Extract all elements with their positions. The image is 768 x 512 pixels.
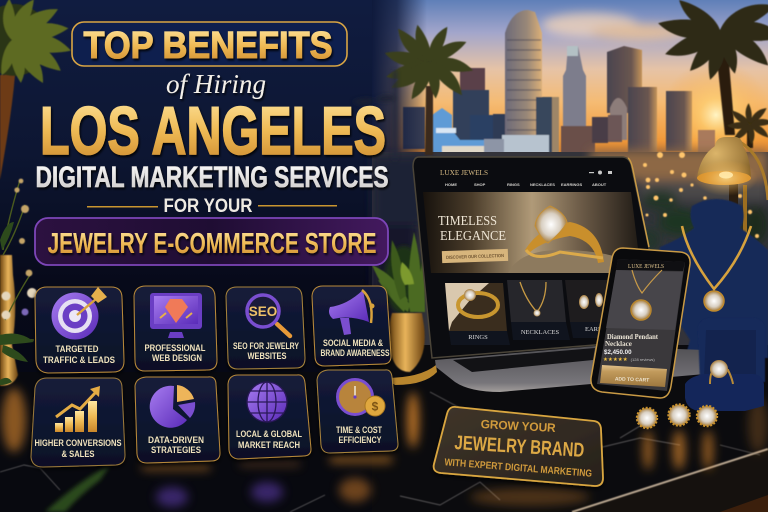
marble veins [0,392,760,512]
laptop base [435,346,705,392]
subheading: of hiring: of Hiring [166,69,266,99]
earring 2 [668,404,690,426]
card: time and cost efficiency [317,370,398,453]
purple pill: jewelry e-commerce store [35,218,388,265]
add to cart button [600,365,667,387]
heading: TOP BENEFITS [84,25,332,67]
hero heading: TIMELESS [438,214,497,229]
card reflections on table [142,456,392,507]
tile: earrings [565,280,620,338]
card: time and cost efficiency: EFFICIENCY [338,435,382,445]
keyboard [453,348,595,372]
foliage mass [384,246,424,314]
card: data-driven strategies: STRATEGIES [151,445,201,455]
price: $2,450.00 [604,349,632,356]
ring box [685,318,765,411]
vase base [385,365,437,385]
brand name: LUXE JEWELS [440,168,488,177]
hero heading: ELEGANCE [440,229,506,244]
hero heading [438,214,506,244]
decoration: left vase with flowers [0,179,37,386]
icon: globe [247,382,287,422]
necklace bust [658,199,768,358]
lit underside [697,171,751,185]
card: data-driven strategies [135,377,220,463]
product image [606,270,683,330]
icon: clock and coin: $ [372,400,379,414]
warm reflections [2,388,768,506]
icon: monitor with gem [150,293,202,338]
benefit cards [31,286,398,467]
stone under ring [508,250,641,273]
icon: rising bar chart [55,386,100,432]
plant leaf on table [45,465,110,512]
lower city: blurred dusk streets [372,152,768,345]
earrings on table [637,404,717,428]
navigation: RINGS [507,182,520,187]
lamp arm [738,141,768,200]
card: targeted traffic and leads: TARGETED [56,344,99,354]
ring gem [710,360,728,378]
city haze tones [372,150,768,345]
card: local and global market reach: LOCAL & GLOBAL [236,429,302,439]
decoration: centre plant and gold vase [372,232,437,385]
pendant [704,291,724,311]
phone [591,248,690,398]
tile: earrings: EARR [585,326,603,333]
card: professional web design: PROFESSIONAL [144,343,206,353]
heading: Los Angeles: LOS ANGELES [40,93,386,169]
lid [698,318,765,382]
earring 3 [697,406,717,426]
laptop [413,157,705,392]
palm tree: far right small [727,103,768,148]
plaque text: WITH EXPERT DIGITAL MARKETING [444,457,593,480]
navigation: EARRINGS [561,182,582,187]
navigation [445,182,607,187]
pill [72,22,347,66]
city lights [643,152,759,238]
card: professional web design [134,286,217,371]
phone brand: LUXE JEWELS [628,264,664,270]
palm tree: right [657,0,768,135]
plaque: grow your jewelry brand [434,407,603,486]
navigation: NECKLACES [530,182,555,187]
lamp shade [697,137,751,184]
card: professional web design: WEB DESIGN [152,353,202,363]
sun glow [661,60,768,170]
bust [658,199,768,358]
box body [685,374,764,411]
phone body [591,248,690,398]
icon: megaphone [329,290,374,335]
hero button: DISCOVER OUR COLLECTION [446,253,505,260]
diamond pendant [631,300,651,320]
dark left fade of sky [372,0,427,165]
necklace chain [682,226,751,289]
tile: necklaces [507,280,570,340]
card: data-driven strategies: DATA-DRIVEN [148,435,204,445]
clouds [542,13,690,40]
plant leaves [372,232,425,312]
ring band [710,370,733,384]
card: time and cost efficiency: TIME & COST [336,425,382,435]
card: targeted traffic and leads [35,287,124,373]
plaque text: GROW YOUR [480,417,556,435]
icon: target with dart [52,287,107,340]
card: local and global market reach [228,375,311,459]
hero button [442,249,508,263]
palm tree: faint behind title [352,70,398,160]
card: SEO for jewelry websites: SEO FOR JEWELRY [233,341,299,351]
skyline buildings [403,10,715,157]
heading: for your with rules: FOR YOUR [164,196,253,217]
hero banner [423,192,641,273]
card: targeted traffic and leads: TRAFFIC & LEADS [43,355,115,365]
navigation: HOME [445,182,457,187]
card: local and global market reach: MARKET REACH [238,440,300,450]
card: higher conversions and sales: & SALES [62,449,94,459]
bulb [719,172,733,178]
card: higher conversions and sales: HIGHER CONVERSIONS [34,438,122,448]
gold vase [389,313,425,372]
navigation: ABOUT [592,182,607,187]
icon: pie chart [150,385,195,428]
palm tree: top left [0,0,73,180]
plaque text [444,417,593,480]
pill [35,218,388,265]
background: Los Angeles sunset skyline [372,0,768,345]
title pill: top benefits [72,22,347,67]
tile: rings: RINGS [468,334,488,341]
earring 1 [637,408,657,428]
plaque text: JEWELRY BRAND [454,432,585,462]
product title: Diamond Pendant [607,333,659,341]
table front edge [572,449,768,512]
tile: rings [445,283,510,345]
card: social media and brand awareness [312,286,391,366]
laptop bezel [413,157,660,358]
phone header [616,259,685,271]
icon: SEO magnifier: SEO [249,304,277,319]
navigation: SHOP [474,182,486,187]
add to cart button: ADD TO CART [615,376,649,384]
lamp [694,137,768,235]
cart icons [589,170,612,174]
marble table top [0,345,768,512]
card: social media and brand awareness: SOCIAL MEDIA & [323,338,383,348]
flower stems [0,180,34,340]
card: higher conversions and sales [31,378,125,467]
sky [372,0,768,165]
hero ring [525,206,604,263]
gold screen edge [628,158,649,247]
label: JEWELRY E-COMMERCE STORE [48,228,376,260]
card: SEO for jewelry websites [226,287,305,369]
leaves [0,222,34,385]
rating: ★★★★★ (128 reviews) [603,356,655,363]
phone: Necklace [605,340,632,348]
phone screen [597,259,685,391]
vase [0,255,18,386]
plaque plate [434,407,603,486]
blossoms [2,179,37,320]
card: social media and brand awareness: BRAND AWARENESS [320,348,390,358]
heading: digital marketing services: DIGITAL MARKETING SERVICES [36,161,388,194]
palm tree: centre [383,23,475,155]
category tiles [445,280,620,345]
tile: necklaces: NECKLACES [521,329,560,336]
card: SEO for jewelry websites: WEBSITES [248,351,286,361]
